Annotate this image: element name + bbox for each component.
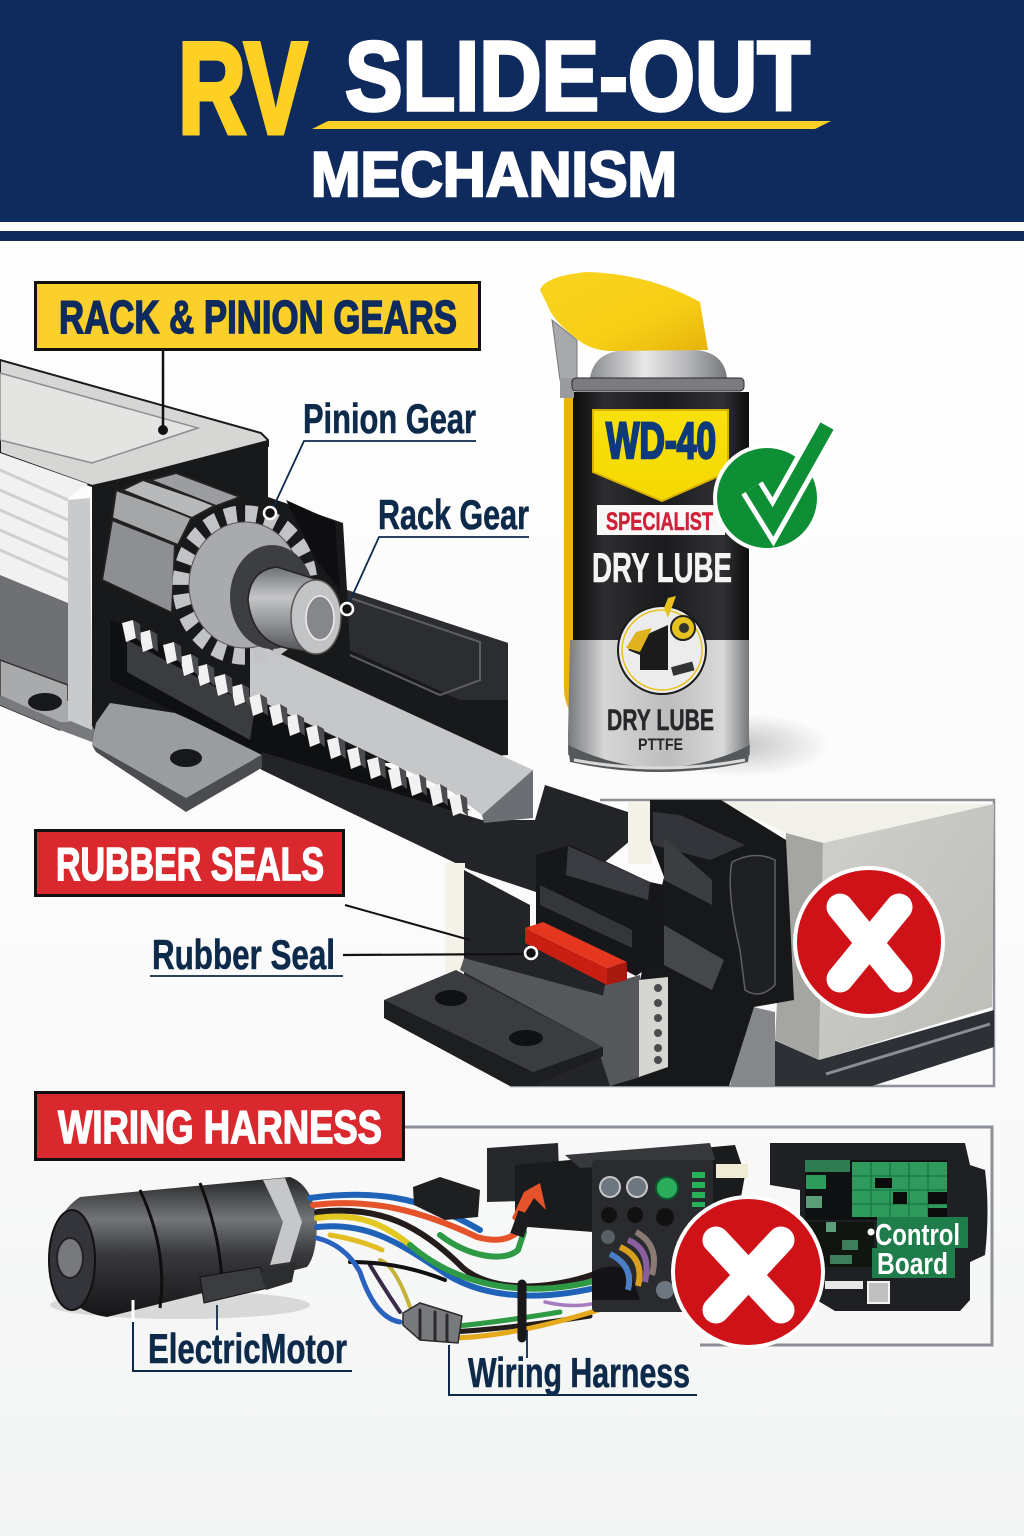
rail beneath rack <box>262 752 631 900</box>
black channel <box>611 800 794 1086</box>
control board label: Control <box>875 1217 960 1252</box>
product: WD-40 spray can <box>540 272 830 777</box>
control board label: Board <box>877 1246 948 1281</box>
rack end face <box>482 770 533 823</box>
perforated strip <box>639 977 668 1077</box>
illustration: control module <box>487 1143 988 1312</box>
heading: rack and pinion gears <box>36 282 480 350</box>
terminal bracket <box>200 1267 268 1303</box>
rack top surface <box>250 640 533 815</box>
inner seal clip <box>536 845 664 976</box>
control board label <box>868 1217 968 1281</box>
flange bolt <box>28 693 62 711</box>
mounting flange <box>384 970 603 1086</box>
rail behind the gear <box>347 590 508 700</box>
product: WD-40 spray can: PTTFE <box>638 735 683 754</box>
flange bolt <box>170 749 202 767</box>
title: MECHANISM: MECHANISM <box>311 140 677 210</box>
label: electric motor: ElectricMotor <box>148 1325 347 1372</box>
button panel <box>592 1160 713 1312</box>
lower base <box>464 870 625 1086</box>
emblem <box>618 596 706 694</box>
rack gear rail recess <box>110 620 470 815</box>
orange plug <box>512 1183 546 1224</box>
illustration: rack and pinion housing <box>0 360 631 900</box>
collar <box>560 378 574 398</box>
WD-40 shield: WD-40 <box>606 412 716 469</box>
flange holes <box>435 990 467 1006</box>
straw <box>552 320 577 380</box>
small connector <box>413 1177 480 1220</box>
label: rack gear <box>341 491 529 615</box>
icon: red X on seals <box>793 866 945 1018</box>
pinion gear <box>185 519 341 654</box>
rack teeth <box>122 620 463 816</box>
label: rubber seal: Rubber Seal <box>152 931 335 978</box>
housing top face <box>0 360 268 486</box>
label: wiring harness: Wiring Harness <box>468 1349 690 1396</box>
WD-40 shield <box>593 410 728 501</box>
header banner <box>0 0 1024 241</box>
chip tag <box>868 1282 889 1303</box>
wiring panel frame <box>405 1127 992 1345</box>
can shadow <box>650 713 830 777</box>
red rubber seal <box>525 922 627 985</box>
yellow cap <box>540 272 708 351</box>
white tag <box>716 1164 748 1178</box>
label: wiring harness <box>449 1330 697 1396</box>
heading: rubber seals: RUBBER SEALS <box>56 838 324 890</box>
icon: red X on wiring <box>671 1195 825 1349</box>
can body bottom <box>568 640 750 770</box>
leader: seals heading <box>345 905 470 940</box>
product name: DRY LUBE <box>592 544 732 591</box>
cable ties <box>518 1284 526 1338</box>
title: RV: RV <box>178 15 307 161</box>
lower silver flange <box>92 703 265 798</box>
illustration: electric motor <box>49 1177 317 1319</box>
housing side ribs <box>0 453 88 603</box>
knurled band <box>263 1178 302 1265</box>
label: rubber seal <box>150 931 537 978</box>
gear slab block <box>102 473 240 613</box>
heading: wiring harness: WIRING HARNESS <box>58 1101 382 1153</box>
title underline <box>312 121 831 129</box>
title: SLIDE-OUT: SLIDE-OUT <box>345 21 810 131</box>
specialist band: SPECIALIST <box>606 508 713 536</box>
label: electric motor <box>133 1300 352 1372</box>
lower label: DRY LUBE <box>607 704 714 737</box>
heading: wiring harness <box>36 1092 404 1160</box>
heading: rack and pinion gears: RACK & PINION GEARS <box>59 291 457 343</box>
wall block <box>721 802 994 843</box>
relay housing <box>487 1143 560 1202</box>
label: pinion gear: Pinion Gear <box>303 395 476 442</box>
inline connector <box>403 1303 462 1343</box>
can body top <box>573 392 749 640</box>
panel frame <box>510 800 994 1086</box>
heading: rubber seals <box>36 830 344 896</box>
label: rack gear: Rack Gear <box>378 491 529 538</box>
illustration: wiring harness wires <box>310 1177 612 1343</box>
label: pinion gear <box>264 395 476 519</box>
motor end cap <box>49 1210 95 1310</box>
leader: rack heading to housing <box>158 351 168 435</box>
pinion hub <box>248 567 318 654</box>
side stripe <box>564 392 574 712</box>
icon: green check <box>713 426 827 552</box>
circuit grid <box>805 1160 947 1267</box>
control board body <box>770 1143 988 1311</box>
cable grommet <box>610 1232 654 1290</box>
wire bundle <box>592 1266 640 1300</box>
status LEDs <box>692 1172 705 1207</box>
dome <box>590 350 727 378</box>
black front frame <box>92 440 508 770</box>
illustration: rubber seal assembly <box>384 800 994 1086</box>
